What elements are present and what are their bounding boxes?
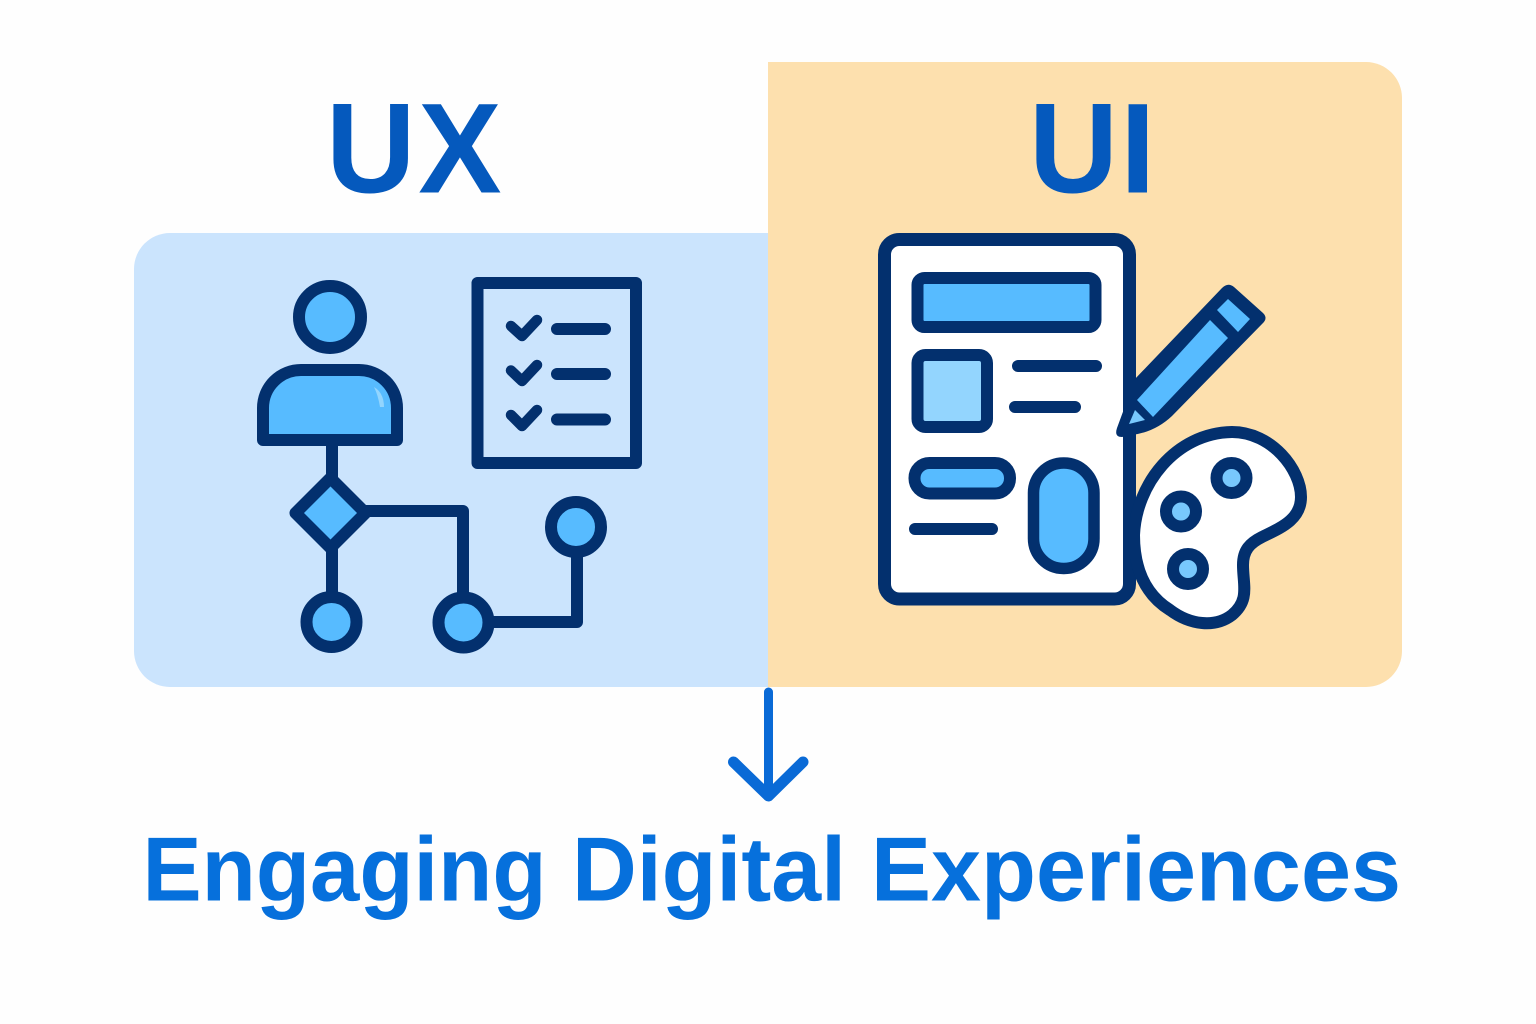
pencil tip — [1129, 410, 1145, 424]
check marks — [511, 320, 537, 426]
flow node: top right — [551, 502, 601, 552]
body highlight — [374, 387, 384, 407]
heading: UI: U — [1029, 78, 1118, 220]
flow node: bottom left — [306, 597, 356, 647]
paint dab: left — [1166, 496, 1196, 526]
page outline — [884, 240, 1130, 599]
pencil barrel — [1137, 320, 1228, 417]
palette outline — [1134, 432, 1301, 623]
icon: UI wireframe page — [884, 240, 1130, 599]
panel: UX background — [134, 233, 768, 687]
pencil outline — [1116, 285, 1266, 437]
caption — [142, 820, 1401, 920]
heading: UI: I — [1120, 78, 1156, 220]
heading: UX: U — [326, 78, 416, 220]
header bar — [918, 278, 1096, 327]
icon: user flow diagram — [263, 286, 601, 648]
image placeholder — [918, 355, 987, 427]
icon: checklist — [478, 283, 636, 463]
tall pill — [1034, 463, 1094, 568]
list lines — [557, 329, 605, 420]
caption: Experiences — [871, 820, 1401, 920]
text lines — [915, 366, 1096, 529]
icon: pencil — [1116, 285, 1266, 437]
decision diamond — [296, 478, 366, 548]
caption: Digital — [572, 820, 846, 920]
user head — [299, 286, 361, 348]
paint dab: top right — [1216, 463, 1246, 493]
heading: UX: X — [418, 78, 502, 220]
panel: UI background — [768, 62, 1402, 687]
pencil cap — [1217, 299, 1250, 332]
arrow — [734, 692, 803, 796]
paint dab: bottom — [1173, 554, 1203, 584]
button pill — [914, 463, 1010, 494]
heading: UX — [326, 78, 502, 220]
checklist page — [478, 283, 636, 463]
flow node: bottom middle — [438, 598, 488, 648]
connector lines — [332, 444, 577, 622]
icon: paint palette — [1134, 432, 1301, 623]
user body — [263, 370, 397, 440]
caption: Engaging — [142, 820, 546, 920]
